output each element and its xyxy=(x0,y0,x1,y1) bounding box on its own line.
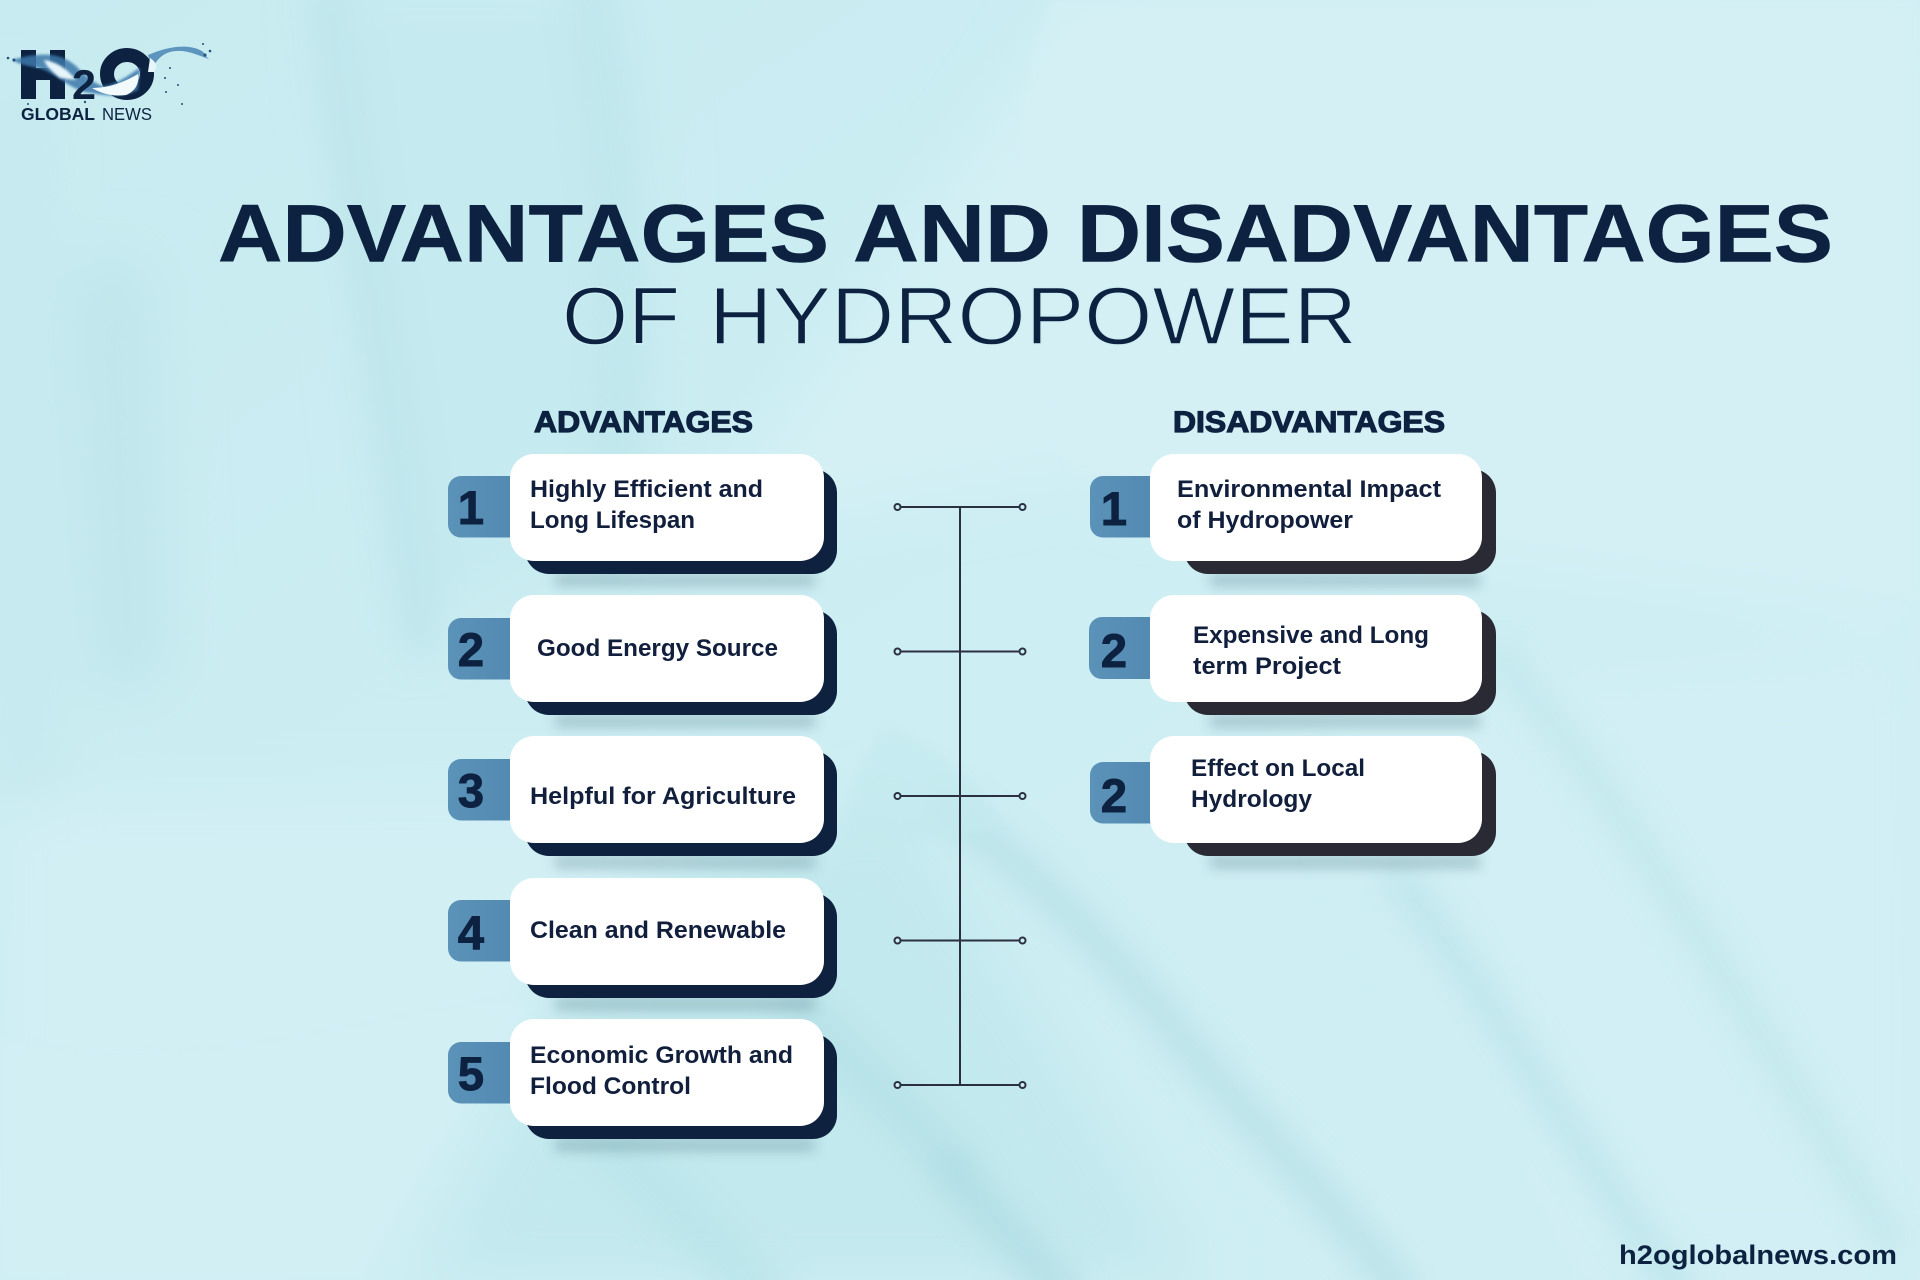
item: advantage 2: Good Energy Source xyxy=(537,635,778,662)
item: advantage 2: 2 xyxy=(458,623,484,676)
item: disadvantage 3: Effect on Local xyxy=(1191,755,1365,782)
title: HYDROPOWER xyxy=(709,271,1357,362)
icon: water splash xyxy=(7,43,212,105)
item: disadvantage 2: term Project xyxy=(1193,653,1341,680)
item: advantage 5: 5 xyxy=(458,1047,484,1100)
item: disadvantage 1 xyxy=(1090,454,1496,586)
item: disadvantage 1: 1 xyxy=(1101,482,1127,535)
item: advantage 3: 3 xyxy=(458,764,484,817)
heading: disadvantages: DISADVANTAGES xyxy=(1173,406,1445,439)
panel: advantages list xyxy=(448,454,837,1151)
logo wordmark: 2: 2 xyxy=(72,61,96,108)
title: AND xyxy=(853,188,1051,280)
heading: advantages: ADVANTAGES xyxy=(534,406,753,439)
item: disadvantage 3: 2 xyxy=(1101,769,1127,822)
item: advantage 2 xyxy=(448,595,837,727)
item: advantage 1: Long Lifespan xyxy=(530,507,695,534)
logo wordmark: H and O xyxy=(21,50,147,99)
title: ADVANTAGES xyxy=(218,188,829,280)
item: advantage 1 xyxy=(448,454,837,586)
item: advantage 4 xyxy=(448,878,837,1010)
item: advantage 5: Flood Control xyxy=(530,1073,691,1100)
item: advantage 5 xyxy=(448,1019,837,1151)
item: advantage 4: Clean and Renewable xyxy=(530,917,786,944)
item: advantage 3 xyxy=(448,736,837,868)
item: disadvantage 3: Hydrology xyxy=(1191,786,1313,813)
item: disadvantage 1: of Hydropower xyxy=(1177,507,1353,534)
item: disadvantage 2 xyxy=(1089,595,1496,727)
logo wordmark: GLOBAL NEWS xyxy=(21,104,152,124)
item: advantage 4: 4 xyxy=(458,906,484,959)
item: advantage 3: Helpful for Agriculture xyxy=(530,783,796,810)
logo wordmark: GLOBAL NEWS: GLOBAL xyxy=(21,104,95,124)
title: DISADVANTAGES xyxy=(1077,188,1833,280)
connector diagram xyxy=(894,504,1026,1088)
title xyxy=(218,188,1833,362)
logo wordmark: GLOBAL NEWS: NEWS xyxy=(102,104,152,124)
item: advantage 1: Highly Efficient and xyxy=(530,476,763,503)
item: advantage 1: 1 xyxy=(458,481,484,534)
item: advantage 5: Economic Growth and xyxy=(530,1042,793,1069)
item: disadvantage 3 xyxy=(1090,736,1496,868)
item: disadvantage 2: 2 xyxy=(1101,624,1127,677)
logo xyxy=(7,43,212,124)
footer: website: h2oglobalnews.com xyxy=(1619,1240,1897,1270)
item: disadvantage 2: Expensive and Long xyxy=(1193,622,1429,649)
title: OF xyxy=(562,271,680,362)
panel: disadvantages list xyxy=(1089,454,1496,868)
item: disadvantage 1: Environmental Impact xyxy=(1177,476,1441,503)
